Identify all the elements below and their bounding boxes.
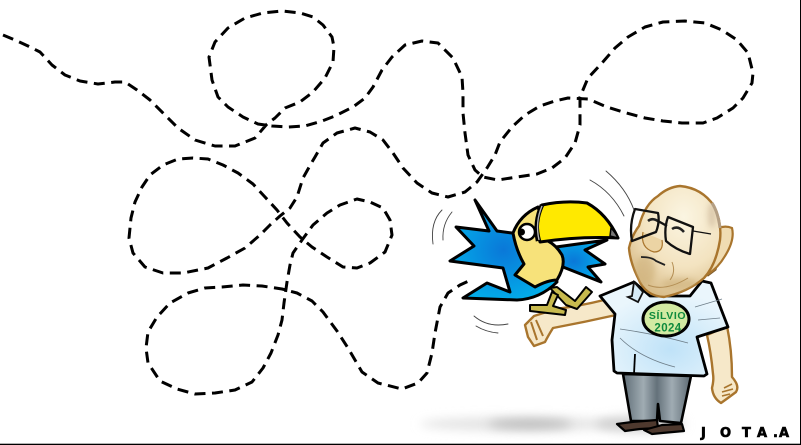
man: face details [641, 203, 720, 287]
man: trousers [623, 374, 691, 423]
toucan: right wing [556, 240, 607, 282]
man with toucan [525, 186, 737, 434]
man: outstretched arm and hand [525, 300, 616, 346]
campaign badge [643, 302, 689, 336]
man: shoes [617, 420, 684, 434]
campaign badge: SÍLVIO [649, 309, 686, 322]
ground shadow [420, 416, 685, 432]
toucan: feet [530, 287, 592, 315]
man: face shading [635, 202, 716, 290]
campaign badge: 2024 [654, 322, 682, 334]
man: glasses [631, 209, 711, 254]
toucan: beak [537, 202, 618, 242]
toucan: pupil [518, 228, 525, 236]
toucan: tail and body [450, 200, 557, 300]
man: head [629, 186, 720, 297]
toucan: beak tip [610, 228, 618, 238]
motion lines around bird [432, 171, 634, 333]
signature: JOTA.A [700, 426, 789, 441]
man: hair patch [706, 262, 718, 276]
toucan: head and chest [513, 207, 563, 287]
man: collar [628, 282, 643, 302]
man: ear [708, 227, 733, 274]
right border [800, 0, 801, 445]
toucan: eye [519, 224, 535, 240]
man: shirt wrinkles [620, 299, 722, 367]
toucan [450, 200, 618, 315]
toucan: beak band [537, 205, 542, 241]
man: shirt [600, 281, 728, 376]
bottom border [0, 444, 801, 445]
man: hanging left arm and hand [707, 326, 737, 403]
